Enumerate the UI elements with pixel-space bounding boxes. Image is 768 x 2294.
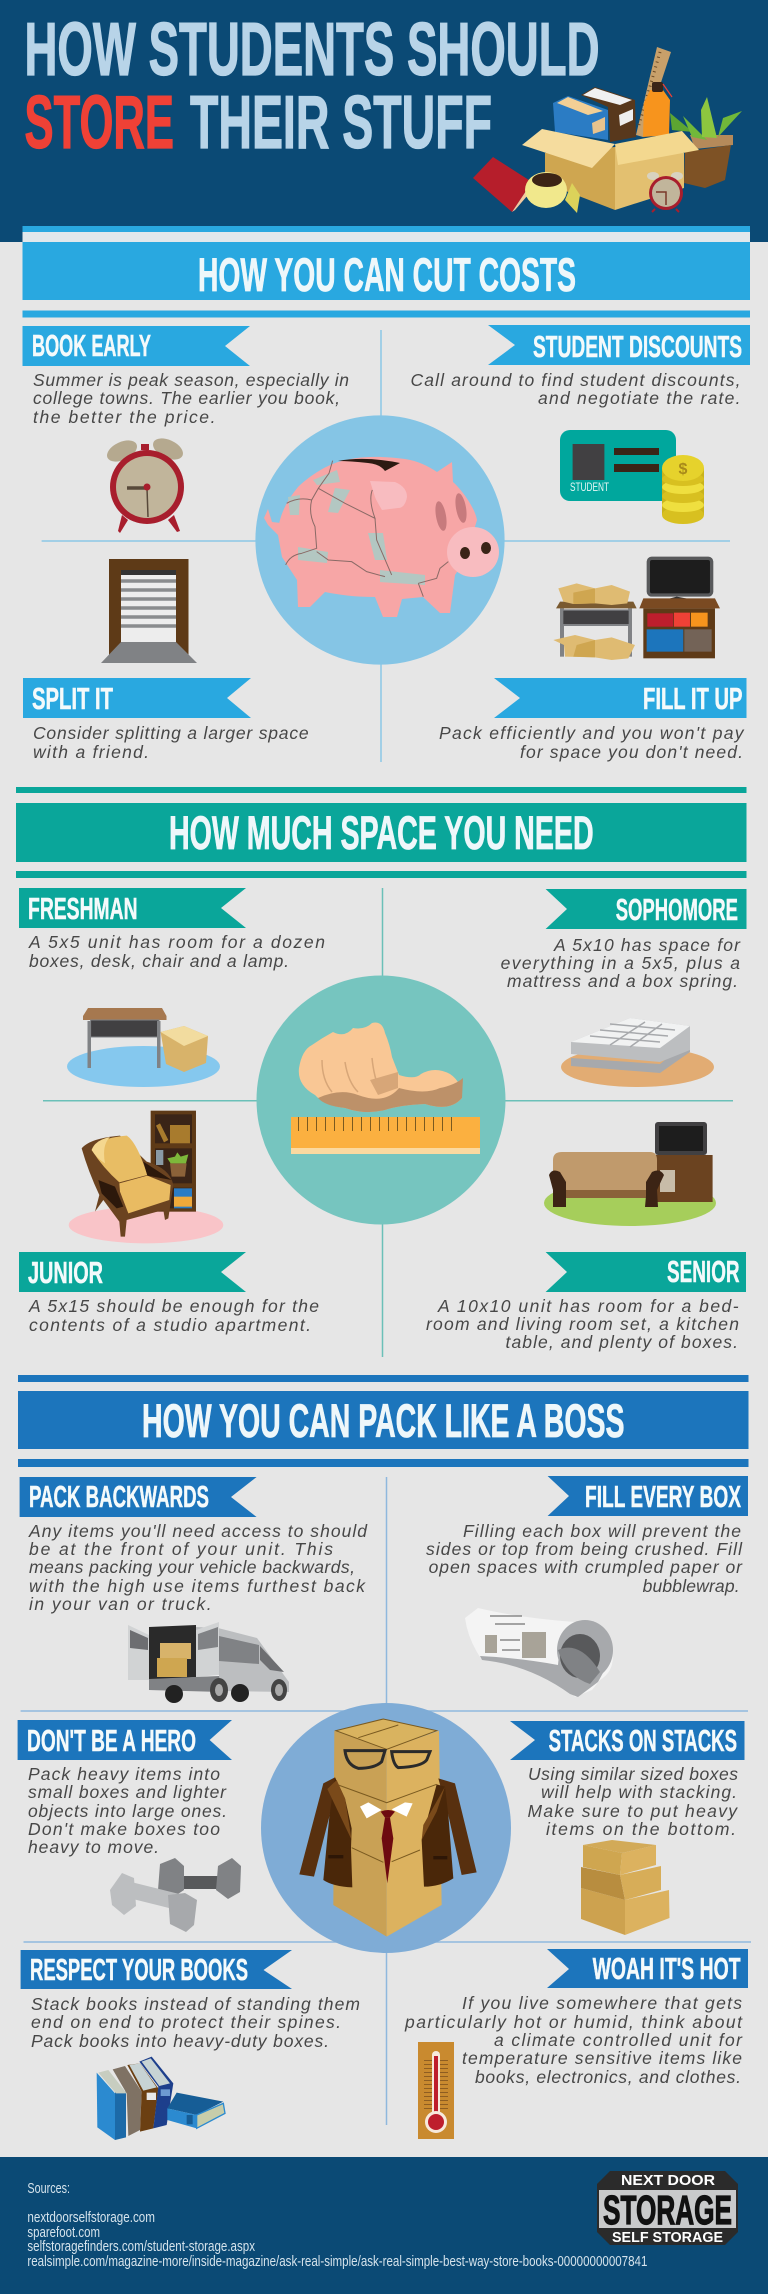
ribbon: pack backwards [20, 1477, 257, 1517]
sources text: nextdoorselfstorage.com [27, 2210, 155, 2226]
text: senior [426, 1296, 739, 1352]
ribbon: respect your books: RESPECT YOUR BOOKS [30, 1953, 248, 1987]
text: pack backwards: be at the front of your unit. This [29, 1539, 333, 1559]
icon: dumbbells [110, 1858, 241, 1932]
sources text [27, 2181, 647, 2270]
text: fill every box [426, 1521, 743, 1596]
ribbon: split it: SPLIT IT [32, 682, 113, 716]
logo: next door storage [597, 2171, 738, 2246]
text: junior [28, 1296, 319, 1335]
text: don't be a hero: Don't make boxes too [28, 1819, 220, 1839]
text: sophomore: everything in a 5x5, plus a [501, 953, 740, 973]
text: sophomore: A 5x10 has space for [553, 935, 741, 955]
text: stacks on stacks: items on the bottom. [546, 1819, 736, 1839]
text: stacks on stacks: will help with stacking. [541, 1782, 737, 1802]
sources text: selfstoragefinders.com/student-storage.aspx [27, 2239, 256, 2255]
ribbon: senior [546, 1252, 746, 1292]
logo: next door storage: SELF STORAGE [612, 2230, 723, 2246]
text: fill every box: open spaces with crumpled paper or [429, 1557, 743, 1577]
ribbon: respect your books [21, 1950, 292, 1989]
text: junior: A 5x15 should be enough for the [28, 1296, 319, 1316]
text: respect your books: end on end to protect their spines. [31, 2012, 341, 2032]
title [24, 7, 600, 164]
text: student discounts: Call around to find student discounts, [410, 370, 740, 390]
text: fill every box: bubblewrap. [643, 1576, 740, 1596]
text: woah it's hot: If you live somewhere that gets [462, 1993, 742, 2013]
text: junior: contents of a studio apartment. [29, 1315, 311, 1335]
icon: mattress on tan rug [561, 1018, 714, 1087]
text: senior: A 10x10 unit has room for a bed- [437, 1296, 739, 1316]
icon: student card and coins [560, 430, 704, 524]
text: book early [33, 370, 349, 427]
text: woah it's hot: temperature sensitive items like [462, 2048, 742, 2068]
ribbon: fill every box [548, 1476, 748, 1516]
text: senior: table, and plenty of boxes. [506, 1332, 738, 1352]
icon: stacked boxes [581, 1840, 670, 1935]
icon: student card and coins: $ [679, 461, 688, 478]
footer background [0, 2157, 768, 2294]
text: pack backwards: means packing your vehicle backwards, [29, 1557, 355, 1577]
text: don't be a hero [28, 1764, 227, 1857]
text: don't be a hero: objects into large ones. [28, 1801, 227, 1821]
text: pack backwards [28, 1521, 368, 1614]
text: stacks on stacks: Make sure to put heavy [528, 1801, 738, 1821]
text: freshman [28, 932, 325, 971]
section heading: how you can cut costs [22, 226, 750, 318]
logo: next door storage: NEXT DOOR [621, 2173, 716, 2189]
icon: rolled newspaper [465, 1608, 613, 1697]
text: split it: Consider splitting a larger space [33, 723, 309, 743]
text: fill it up: Pack efficiently and you won't pay [439, 723, 745, 743]
icon: desk and box on blue rug [67, 1008, 220, 1087]
icon: armchair and bookcase on pink rug [69, 1111, 223, 1243]
text: don't be a hero: small boxes and lighter [28, 1782, 227, 1802]
text: student discounts: and negotiate the rate. [538, 388, 740, 408]
icon: sofa and tv on green rug [544, 1122, 716, 1226]
ribbon: junior [19, 1252, 246, 1292]
center circle: broken piggy bank [255, 415, 505, 665]
ribbon: woah it's hot [547, 1949, 748, 1988]
text: woah it's hot: particularly hot or humid, think about [404, 2012, 743, 2032]
text: freshman: A 5x5 unit has room for a dozen [28, 932, 325, 952]
ribbon: pack backwards: PACK BACKWARDS [29, 1480, 209, 1514]
ribbon: book early: BOOK EARLY [32, 329, 151, 363]
text: pack backwards: with the high use items furthest back [29, 1576, 366, 1596]
text: woah it's hot: a climate controlled unit for [494, 2030, 743, 2050]
text: pack backwards: Any items you'll need access to should [28, 1521, 368, 1541]
section heading: how much space you need [16, 787, 746, 878]
text: sophomore [501, 935, 741, 991]
text: sophomore: mattress and a box spring. [507, 971, 738, 991]
text: fill every box: sides or top from being crushed. Fill [426, 1539, 743, 1559]
sources text: Sources: [27, 2181, 70, 2197]
text: respect your books: Pack books into heavy-duty boxes. [31, 2031, 329, 2051]
text: respect your books: Stack books instead of standing them [31, 1994, 360, 2014]
ribbon: student discounts [488, 325, 750, 365]
text: fill it up [439, 723, 745, 762]
icon: stack of books [97, 2057, 225, 2140]
text: woah it's hot [404, 1993, 743, 2087]
text: book early: college towns. The earlier you book, [33, 388, 340, 408]
ribbon: stacks on stacks [510, 1721, 744, 1760]
icon: alarm clock [104, 434, 186, 533]
icon: student card and coins: STUDENT [570, 480, 609, 494]
text: stacks on stacks: Using similar sized boxes [528, 1764, 738, 1784]
text: pack backwards: in your van or truck. [29, 1594, 212, 1614]
ribbon: freshman [19, 888, 246, 928]
text: stacks on stacks [528, 1764, 738, 1839]
sources text: sparefoot.com [27, 2225, 100, 2241]
text: don't be a hero: Pack heavy items into [28, 1764, 220, 1784]
icon: packed desk and tv stand [553, 557, 720, 660]
text: student discounts [410, 370, 740, 408]
icon: thermometer [418, 2042, 454, 2139]
text: freshman: boxes, desk, chair and a lamp. [29, 951, 289, 971]
ribbon: sophomore [546, 889, 746, 929]
ribbon: split it [23, 678, 251, 718]
icon: moving box with belongings [473, 47, 742, 213]
text: respect your books [31, 1994, 360, 2051]
text: senior: room and living room set, a kitchen [426, 1314, 739, 1334]
text: book early: the better the price. [33, 407, 216, 427]
ribbon: don't be a hero [18, 1720, 232, 1760]
center circle: hand and ruler [256, 976, 506, 1224]
icon: storage unit door [101, 559, 197, 663]
text: book early: Summer is peak season, especially in [33, 370, 349, 390]
title: THEIR STUFF [190, 80, 492, 164]
text: don't be a hero: heavy to move. [28, 1837, 159, 1857]
text: fill every box: Filling each box will prevent the [463, 1521, 741, 1541]
section heading: how you can pack like a boss [18, 1375, 748, 1467]
ribbon: junior: JUNIOR [28, 1256, 103, 1290]
center circle: box man in jacket [261, 1703, 511, 1953]
text: split it [33, 723, 309, 762]
text: fill it up: for space you don't need. [520, 742, 743, 762]
title: STORE [24, 80, 174, 164]
text: woah it's hot: books, electronics, and clothes. [475, 2067, 741, 2087]
ribbon: fill it up [494, 678, 746, 718]
ribbon: don't be a hero: DON'T BE A HERO [27, 1724, 196, 1758]
text: split it: with a friend. [33, 742, 149, 762]
ribbon: freshman: FRESHMAN [28, 892, 138, 926]
header background [0, 0, 768, 242]
icon: moving van [128, 1622, 289, 1703]
